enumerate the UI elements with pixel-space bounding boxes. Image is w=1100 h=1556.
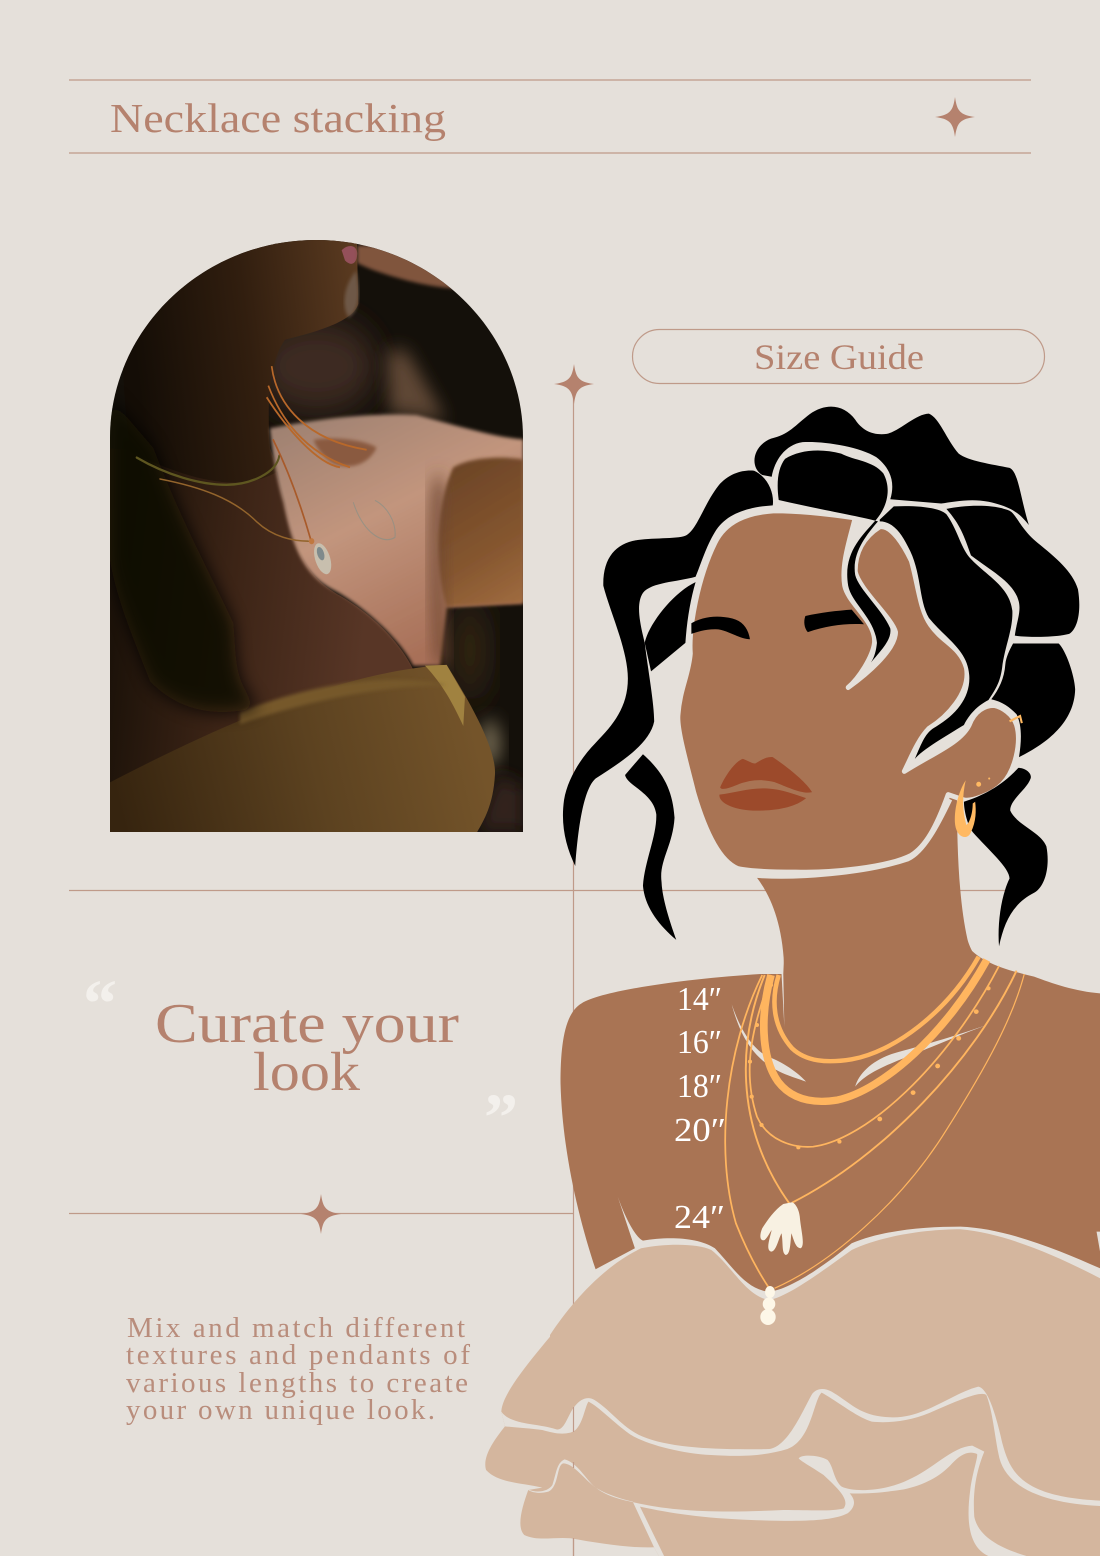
size guide pill: Size Guide	[754, 337, 924, 377]
16 inch necklace	[764, 960, 987, 1101]
necklace length labels: 24″	[674, 1199, 725, 1236]
photo armpit shadow	[313, 439, 377, 466]
ruffle line lower	[528, 1446, 1026, 1556]
rule segments showing through ruffles	[572, 1407, 574, 1556]
photo: arch portrait with necklace	[100, 230, 523, 833]
illustration: ruffled dress	[485, 1300, 1100, 1556]
face	[678, 511, 1018, 872]
necklace length labels: 16″	[677, 1024, 722, 1061]
photo fabric top	[110, 665, 495, 833]
collarbone highlights	[732, 974, 1100, 1252]
photo lower shadow by torso	[430, 476, 448, 666]
icon: closing quote: ”	[484, 1079, 518, 1155]
illustration: shoulders and necklaces	[550, 950, 1100, 1350]
14 inch necklace	[774, 957, 979, 1061]
photo chest in shade	[110, 465, 413, 782]
necklace length labels: 20″	[674, 1112, 726, 1149]
photo background blurs	[257, 319, 523, 832]
icon: sparkle on left rule	[301, 1194, 341, 1234]
photo pendant	[309, 538, 332, 574]
body text	[126, 1312, 470, 1426]
18 inch beaded necklace	[748, 966, 999, 1149]
photo windblown orange hair	[267, 366, 367, 467]
icon: sparkle on vertical rule	[554, 364, 594, 404]
quote heading: look	[253, 1041, 361, 1102]
pendant: pearl drop	[760, 1286, 776, 1325]
hair strands	[563, 407, 1079, 946]
photo gold necklaces	[137, 440, 311, 541]
body text: your own unique look.	[126, 1394, 435, 1426]
size guide pill	[632, 330, 1044, 384]
photo jaw and neck	[123, 230, 358, 483]
photo hair	[110, 397, 260, 712]
photo arm in warm shadow	[438, 458, 523, 607]
photo chin and lips	[344, 271, 359, 317]
dress silhouette	[485, 1300, 1100, 1556]
body text: textures and pendants of	[126, 1339, 470, 1371]
eyebrows	[691, 610, 864, 639]
ruffle line upper	[501, 1387, 1100, 1506]
illustration: head and hair	[563, 407, 1079, 971]
necklace length labels: 14″	[677, 981, 722, 1018]
icon: opening quote: “	[83, 965, 117, 1041]
necklace length labels: 18″	[677, 1068, 722, 1105]
pendant: coral charm	[760, 1202, 803, 1255]
body text: Mix and match different	[127, 1312, 465, 1344]
icon: sparkle top right	[935, 97, 975, 137]
shoulders	[561, 950, 1100, 1292]
quote heading	[155, 993, 459, 1102]
dress upper edge	[550, 1229, 1100, 1350]
photo raised hand	[357, 246, 453, 288]
photo lit shoulder and collarbone	[270, 415, 523, 666]
face-to-neck line	[755, 799, 950, 876]
24 inch necklace	[725, 974, 1024, 1288]
lips	[719, 757, 812, 811]
neck	[757, 793, 985, 971]
photo tattoo marks	[353, 500, 395, 540]
20 inch necklace	[746, 971, 1017, 1203]
necklace length labels	[674, 981, 726, 1236]
quote heading: Curate your	[155, 993, 459, 1055]
body text: various lengths to create	[126, 1367, 468, 1399]
icon: hoop earring	[955, 716, 1022, 837]
title: Necklace stacking	[110, 95, 446, 141]
